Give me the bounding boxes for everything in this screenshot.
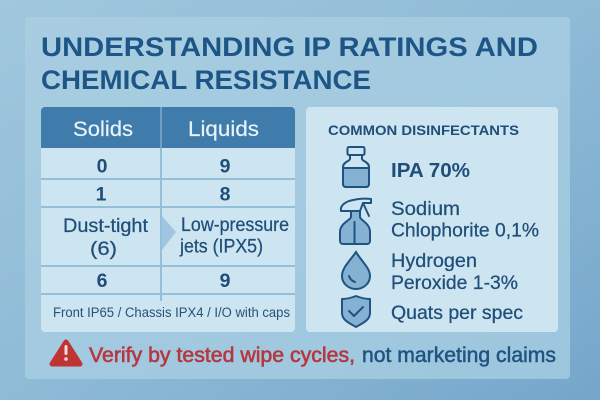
table header: Liquids [188,118,259,141]
title [41,32,538,95]
arrow: row chevron [162,216,176,250]
row: 0 / 9 [97,156,231,178]
callout: warning [52,342,556,367]
table body [41,107,295,332]
row: dust-tight / low-pressure jets: Dust-tight [63,215,149,237]
callout: warning: not marketing claims [362,344,556,367]
row: 6 / 9: 9 [220,270,231,292]
label: Hydrogen Peroxide 1-3% [391,250,518,294]
panel: common disinfectants [306,107,558,332]
table grid lines [41,148,295,301]
row: dust-tight / low-pressure jets: (6) [90,238,117,260]
row: dust-tight / low-pressure jets: jets (IPX5) [179,236,263,258]
row: 1 / 8: 8 [220,184,231,206]
title: CHEMICAL RESISTANCE [41,65,371,95]
row: 6 / 9: 6 [97,270,108,292]
row: 1 / 8: 1 [96,184,107,206]
icon: spray bottle [340,199,371,244]
label: Hydrogen Peroxide 1-3%: Hydrogen [391,250,477,272]
label: Sodium Chlophorite 0,1%: Sodium [391,198,460,220]
row: dust-tight / low-pressure jets: Low-pressure [181,214,289,236]
row: dust-tight / low-pressure jets [63,214,289,260]
label: IPA 70%: IPA 70% [391,159,470,182]
row: 6 / 9 [97,270,231,292]
label: Quats per spec: Quats per spec [391,302,523,324]
icon: shield check [342,296,370,327]
label: Sodium Chlophorite 0,1% [391,198,539,242]
panel heading: COMMON DISINFECTANTS [328,122,519,138]
label: Hydrogen Peroxide 1-3%: Peroxide 1-3% [391,272,518,294]
table header: Solids [73,118,133,141]
label: Sodium Chlophorite 0,1%: Chlophorite 0,1% [391,220,539,242]
row: 1 / 8 [96,184,231,206]
icon: bottle [343,147,369,187]
warning text: Verify by tested wipe cycles, [89,344,355,367]
row: 0 / 9: 0 [97,156,108,178]
icon: droplet [342,252,370,289]
table footnote: Front IP65 / Chassis IPX4 / I/O with caps [53,305,290,320]
row: 0 / 9: 9 [220,156,231,178]
panel: IP rating table [41,107,295,332]
table header [41,107,295,148]
icon: warning triangle [52,342,80,364]
title: UNDERSTANDING IP RATINGS AND [41,32,538,62]
